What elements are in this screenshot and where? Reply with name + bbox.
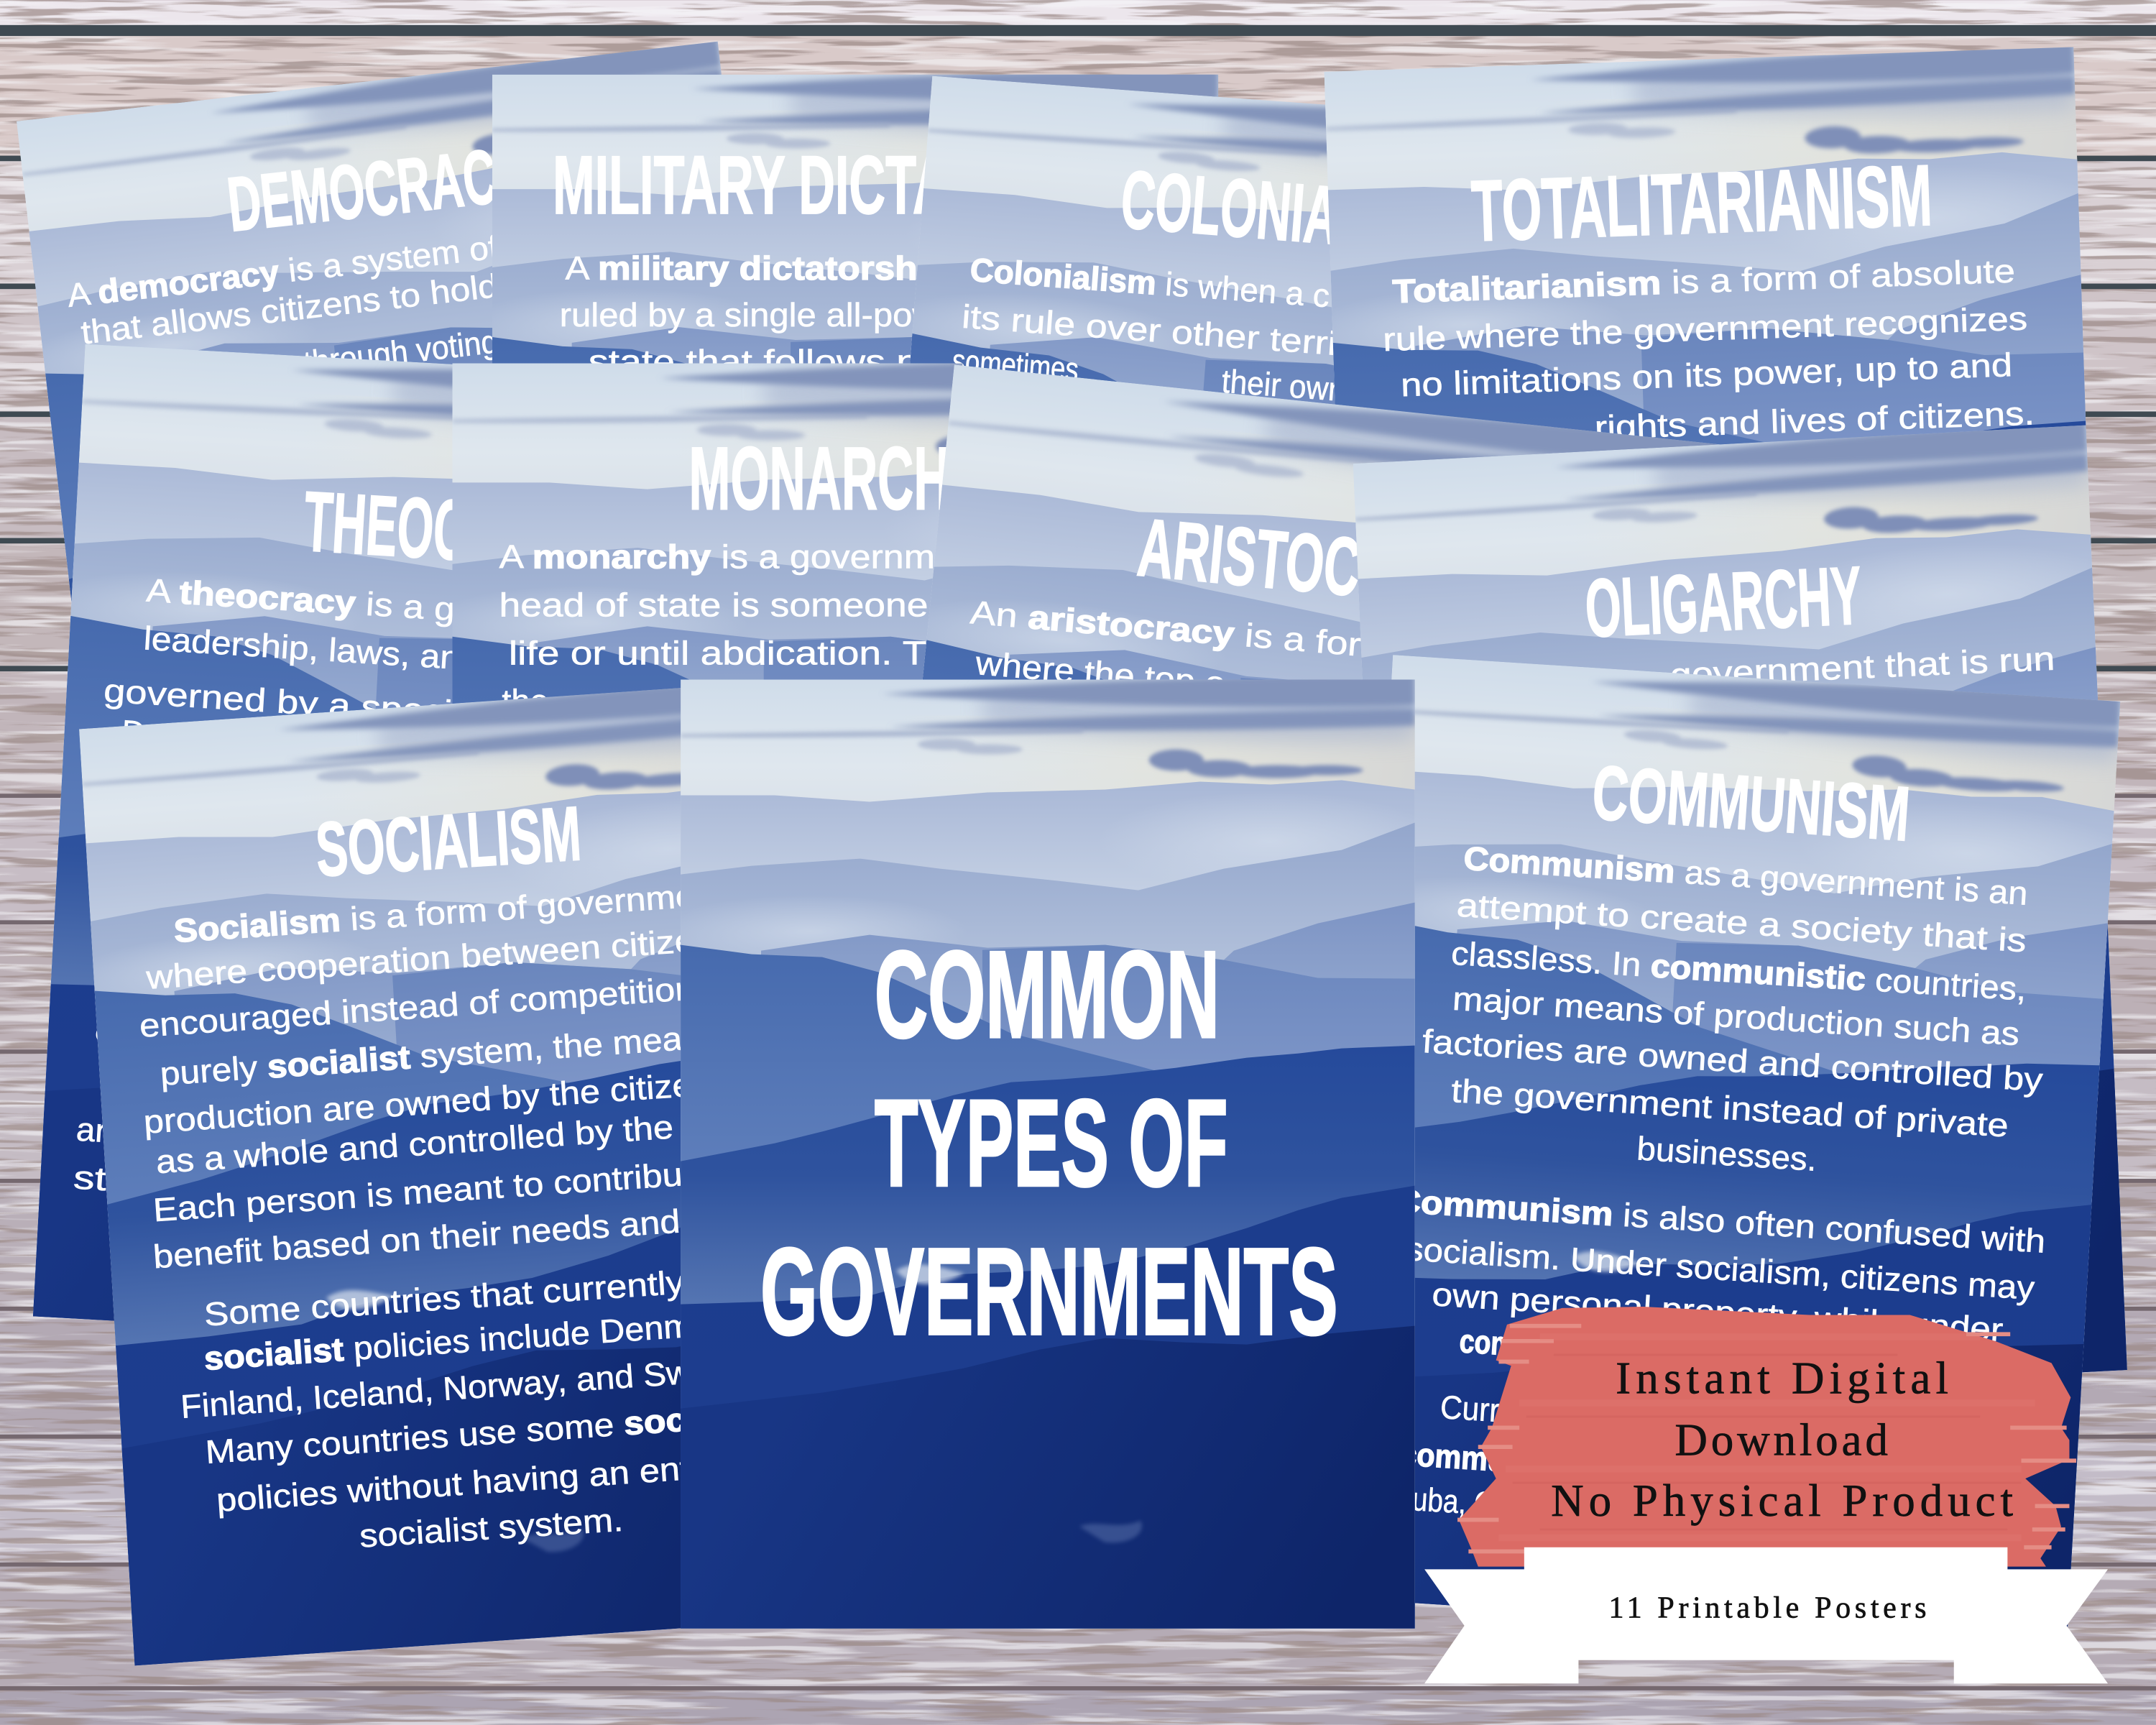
theocracy body text: Du (121, 713, 164, 753)
paint splash badge (1457, 1307, 2076, 1567)
theocracy body text: governed by a specifi (103, 671, 473, 732)
aristocracy title: ARISTOCRACY (1134, 502, 1504, 627)
totalitarianism body text: Totalitarianism is a form of absolute (1392, 252, 2016, 310)
cover title (760, 926, 1338, 1361)
poster: socialism (50, 671, 885, 1668)
socialism body text: where cooperation between citize (144, 921, 696, 996)
poster: oligarchy (1324, 417, 2155, 1410)
democracy body text: that allows citizens to hold (79, 267, 500, 351)
poster: colonialism (833, 67, 1674, 1052)
theocracy body text: leadership, laws, and (142, 620, 481, 678)
colonialism body text (951, 251, 1347, 408)
theocracy title: THEOCRACY (301, 474, 602, 586)
colonialism body text: sometimes (951, 341, 1080, 388)
badge text: Download (1674, 1415, 1888, 1466)
ribbon label: 11 Printable Posters (1609, 1591, 1926, 1624)
ribbon banner (1424, 1547, 2108, 1683)
socialism body text: production are owned by the citize (142, 1066, 694, 1141)
badge text (1551, 1353, 2013, 1526)
poster: military dictatorship (464, 68, 1245, 1013)
military dictatorship body text (560, 249, 950, 380)
communism body text: the government instead of private (1450, 1072, 2009, 1144)
military dictatorship title: MILITARY DICTATORSHIP (553, 139, 1169, 231)
military dictatorship body text: state that follows n (589, 343, 918, 380)
theocracy body text: c (93, 1013, 123, 1052)
poster: cover (652, 673, 1442, 1629)
communism body text: Currently (1439, 1388, 1565, 1433)
socialism body text: Many countries use some soc (204, 1401, 687, 1471)
theocracy body text: A theocracy is a go (145, 571, 477, 629)
military dictatorship body text: A military dictatorship (565, 249, 950, 287)
colonialism body text: its rule over other terri (961, 298, 1337, 362)
socialism body text: Socialism is a form of governme (172, 877, 696, 949)
socialism body text: benefit based on their needs and (152, 1202, 681, 1275)
democracy body text (65, 228, 500, 382)
totalitarianism body text (1382, 252, 2035, 446)
socialism body text: policies without having an ent (215, 1449, 691, 1519)
monarchy body text: life or until abdication. Th (509, 634, 949, 671)
colonialism body text: their own (1220, 362, 1347, 408)
poster: democracy (0, 32, 847, 1026)
totalitarianism body text: no limitations on its power, up to and (1400, 346, 2013, 403)
communism body text: socialism. Under socialism, citizens may (1405, 1230, 2036, 1307)
totalitarianism body text: rights and lives of citizens. (1594, 394, 2035, 446)
communism body text: Cuba, Chi (1391, 1478, 1517, 1524)
socialism body text: socialist policies include Denm (203, 1307, 694, 1377)
theocracy body text: ar (75, 1110, 108, 1149)
socialism body text: Finland, Iceland, Norway, and Sw (180, 1353, 693, 1425)
aristocracy body text: where the top o (974, 644, 1227, 702)
socialism title: SOCIALISM (313, 790, 584, 893)
socialism body text: socialist system. (359, 1501, 625, 1555)
aristocracy body text (969, 593, 1363, 702)
poster: aristocracy (825, 354, 1749, 1432)
military dictatorship body text: ruled by a single all-pow (560, 296, 939, 334)
poster: monarchy (453, 364, 963, 704)
communism body text: Communism as a government is an (1462, 840, 2029, 912)
communism body text: classless. In communistic countries, (1450, 934, 2027, 1008)
poster: theocracy (4, 335, 866, 1359)
socialism body text: Some countries that currently (203, 1263, 686, 1333)
theocracy body text: st (73, 1159, 108, 1197)
communism body text: communist (1399, 1435, 1560, 1482)
communism body text: communism (1458, 1322, 1618, 1369)
cover title: COMMON (875, 926, 1220, 1064)
communism body text: own personal property, while under (1431, 1275, 2004, 1348)
colonialism title: COLONIALISM (1118, 153, 1454, 271)
badge text: Instant Digital (1616, 1353, 1948, 1404)
totalitarianism body text: rule where the government recognizes (1382, 300, 2028, 358)
democracy body text: A democracy is a system of (65, 228, 500, 314)
monarchy body text (499, 543, 933, 700)
communism body text: Communism is also often confused with (1393, 1182, 2047, 1260)
oligarchy title: OLIGARCHY (1583, 550, 1864, 655)
theocracy body text (73, 571, 481, 1197)
socialism body text (138, 877, 704, 1555)
democracy title: DEMOCRACY (224, 129, 531, 248)
poster: totalitarianism (1294, 39, 2133, 1042)
colonialism body text: Colonialism is when a c (969, 251, 1331, 314)
communism body text: major means of production such as (1452, 980, 2021, 1052)
communism body text: factories are owned and controlled by (1422, 1022, 2044, 1098)
aristocracy body text: An aristocracy is a for (969, 593, 1363, 663)
poster: communism (1311, 646, 2147, 1647)
socialism body text: as a whole and controlled by the (155, 1108, 674, 1180)
monarchy body text: the (502, 682, 548, 719)
monarchy title: MONARCHY (689, 428, 983, 528)
communism title: COMMUNISM (1590, 749, 1912, 857)
monarchy body text: A monarchy is a governm (499, 538, 935, 576)
monarchy body text: head of state is someone (499, 586, 928, 624)
cover title: TYPES OF (875, 1075, 1228, 1213)
socialism body text: purely socialist system, the mean (159, 1018, 704, 1092)
socialism body text: encouraged instead of competition (138, 969, 696, 1044)
oligarchy body text: government that is run (1669, 640, 2055, 694)
communism body text: businesses. (1636, 1129, 1818, 1178)
cover title: GOVERNMENTS (760, 1223, 1338, 1361)
communism body text (1391, 840, 2047, 1524)
communism body text: attempt to create a society that is (1456, 886, 2027, 959)
badge text: No Physical Product (1551, 1476, 2013, 1526)
socialism body text: Each person is meant to contribut (152, 1154, 694, 1228)
democracy body text: through voting (302, 322, 500, 382)
